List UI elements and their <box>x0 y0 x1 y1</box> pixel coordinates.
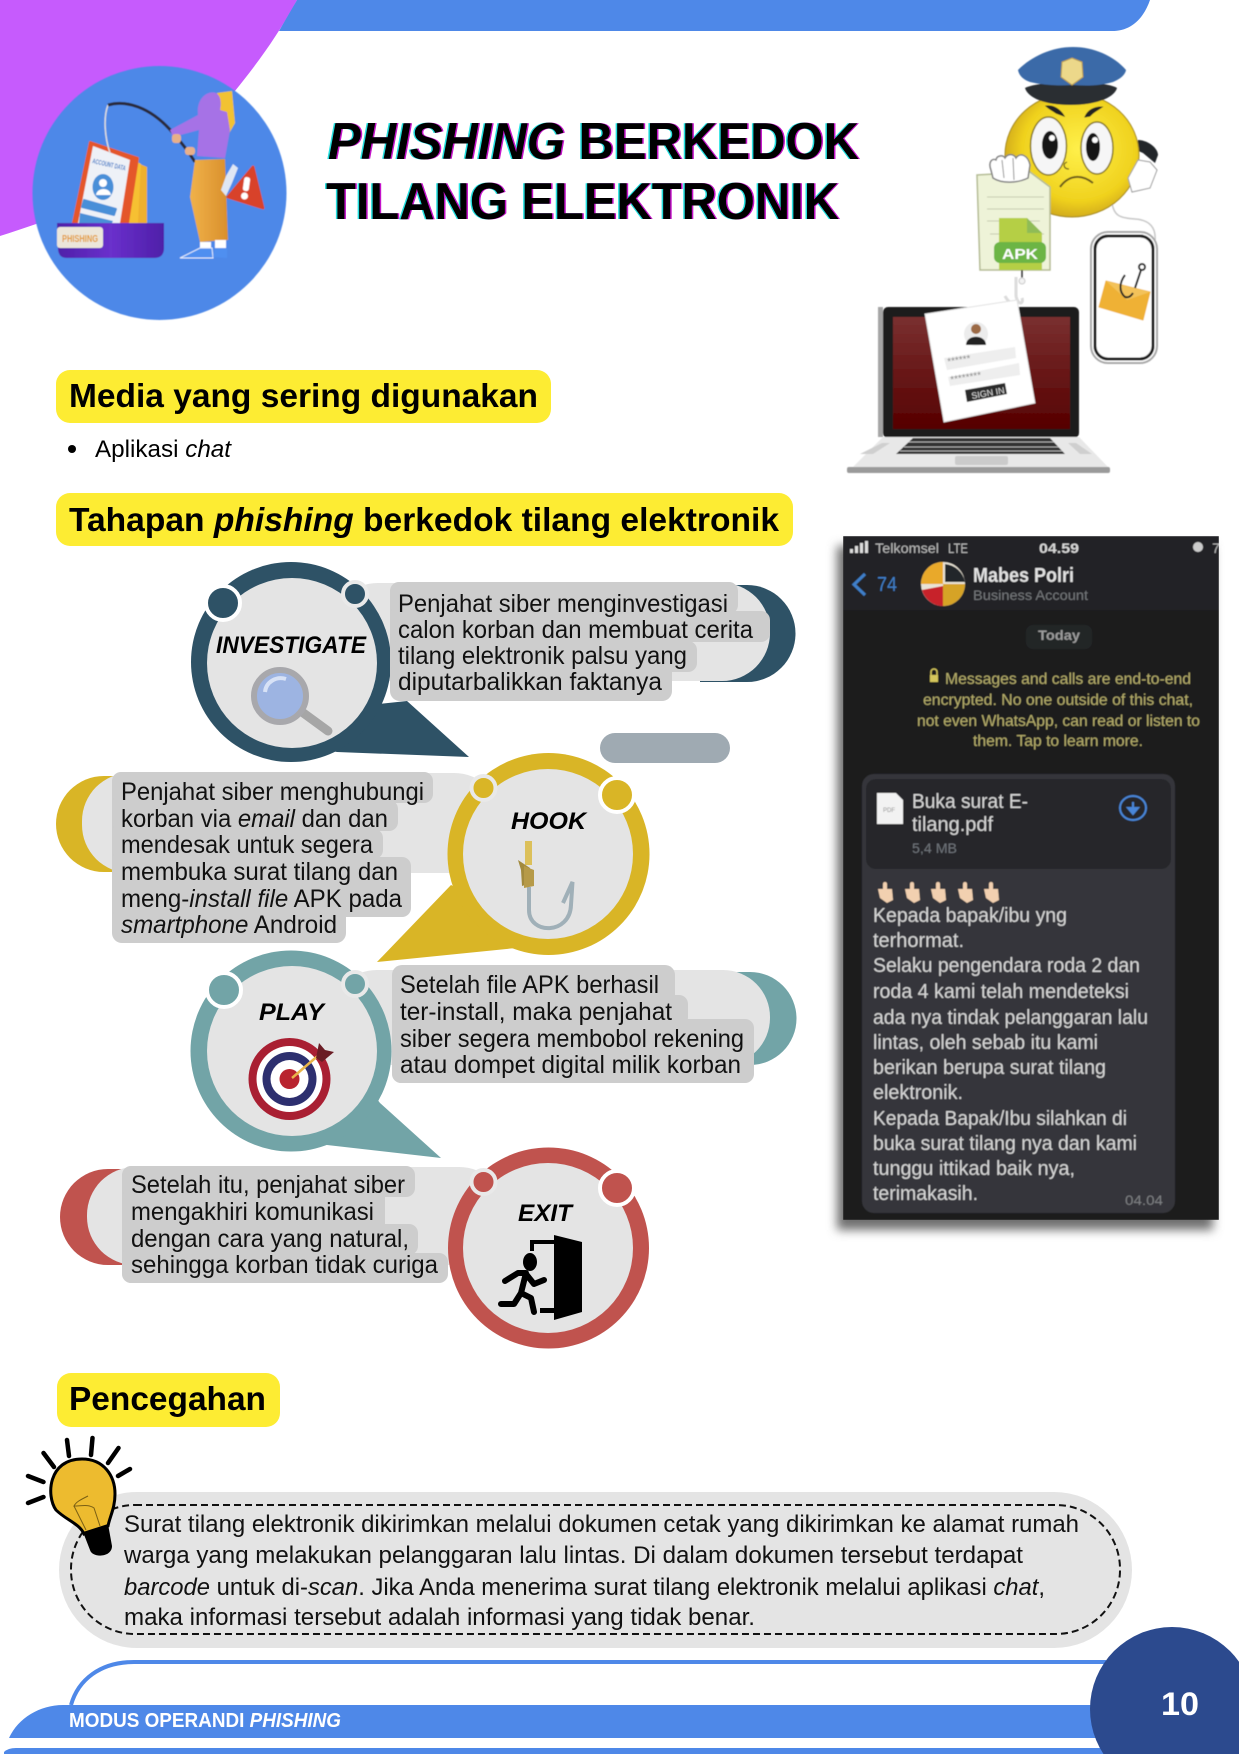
illustration: police emoji, APK document, phone and laptop: ****** <box>947 353 972 368</box>
WhatsApp screenshot: roda 4 kami telah mendeteksi <box>873 981 1129 1003</box>
title: TILANG ELEKTRONIK <box>328 173 841 231</box>
text: play description: atau dompet digital milik korban <box>400 1051 741 1079</box>
text: play description: siber segera membobol rekening <box>400 1025 744 1053</box>
step: investigate: INVESTIGATE <box>216 632 367 659</box>
header illustration: fisherman phishing <box>32 66 286 320</box>
title: PHISHING BERKEDOK <box>326 113 858 171</box>
page number badge <box>1090 1627 1239 1754</box>
WhatsApp screenshot: 04.04 <box>1125 1192 1163 1208</box>
WhatsApp screenshot: tilang.pdf <box>912 814 993 836</box>
purple corner shape <box>0 0 297 236</box>
header illustration: fisherman phishing: ACCOUNT DATA <box>92 158 126 173</box>
WhatsApp screenshot: Kepada Bapak/Ibu silahkan di <box>873 1108 1127 1130</box>
icon: running person and door <box>501 1235 582 1320</box>
prevention callout: barcode untuk di-scan. Jika Anda menerima surat tilang elektronik melalui aplikasi chat, <box>124 1574 1045 1601</box>
WhatsApp screenshot: Kepada bapak/ibu yng <box>873 905 1067 927</box>
icon: light bulb <box>28 1438 130 1556</box>
text: investigate description: calon korban dan membuat cerita <box>398 616 753 644</box>
WhatsApp screenshot: encrypted. No one outside of this chat, <box>923 692 1193 709</box>
footer band: MODUS OPERANDI PHISHING <box>69 1710 341 1732</box>
icon: target with arrow <box>248 1038 334 1120</box>
icon: magnifier <box>254 670 328 731</box>
prevention callout: Surat tilang elektronik dikirimkan melalui dokumen cetak yang dikirimkan ke alamat rumah <box>124 1511 1079 1538</box>
WhatsApp screenshot: Today <box>1038 627 1080 643</box>
title <box>324 113 861 231</box>
text: exit description: mengakhiri komunikasi <box>131 1198 374 1226</box>
WhatsApp screenshot: 04.59 <box>1039 540 1079 556</box>
text: exit description <box>122 1166 448 1283</box>
icon: fish hook <box>518 841 572 928</box>
step: investigate <box>191 562 796 762</box>
step: play <box>190 950 796 1158</box>
WhatsApp screenshot: PDF <box>883 808 895 814</box>
WhatsApp screenshot <box>837 536 1220 1230</box>
text: play description <box>392 965 754 1083</box>
heading: prevention <box>57 1373 280 1427</box>
WhatsApp screenshot: Business Account <box>973 587 1088 603</box>
step: exit <box>60 1148 649 1348</box>
step: hook <box>56 753 650 962</box>
heading: media: Media yang sering digunakan <box>69 377 538 414</box>
text: hook description: smartphone Android <box>121 911 337 939</box>
heading: prevention: Pencegahan <box>69 1380 266 1417</box>
WhatsApp screenshot: 74 <box>877 574 897 596</box>
WhatsApp screenshot: Buka surat E- <box>912 791 1028 813</box>
illustration: police emoji, APK document, phone and laptop: SIGN IN <box>971 385 1005 401</box>
WhatsApp screenshot: buka surat tilang nya dan kami <box>873 1133 1137 1155</box>
text: investigate description <box>390 582 770 701</box>
header illustration: fisherman phishing: PHISHING <box>62 234 98 245</box>
title: TILANG ELEKTRONIK <box>326 173 839 231</box>
step: play: PLAY <box>259 999 326 1026</box>
illustration: police emoji, APK document, phone and laptop: ******** <box>950 370 982 386</box>
heading: media <box>56 370 551 423</box>
text: investigate description: Penjahat siber menginvestigasi <box>398 590 728 618</box>
WhatsApp screenshot: them. Tap to learn more. <box>973 733 1143 750</box>
step: hook: HOOK <box>511 808 588 835</box>
WhatsApp screenshot: not even WhatsApp, can read or listen to <box>917 713 1200 730</box>
title: PHISHING BERKEDOK <box>330 113 861 171</box>
text: exit description: dengan cara yang natural, <box>131 1225 409 1253</box>
WhatsApp screenshot: tunggu ittikad baik nya, <box>873 1158 1075 1180</box>
illustration: police emoji, APK document, phone and laptop: APK <box>1002 246 1038 263</box>
text: investigate description: diputarbalikkan faktanya <box>398 668 662 696</box>
WhatsApp screenshot: Mabes Polri <box>973 565 1074 587</box>
WhatsApp screenshot: terhormat. <box>873 930 964 952</box>
WhatsApp screenshot: Selaku pengendara roda 2 dan <box>873 955 1140 977</box>
text: hook description: mendesak untuk segera <box>121 831 373 859</box>
prevention callout <box>59 1492 1132 1648</box>
text: play description: Setelah file APK berhasil <box>400 971 659 999</box>
text: hook description: membuka surat tilang dan <box>121 858 398 886</box>
heading: stages: Tahapan phishing berkedok tilang elektronik <box>69 501 780 538</box>
WhatsApp screenshot: berikan berupa surat tilang <box>873 1057 1106 1079</box>
prevention callout: warga yang melakukan pelanggaran lalu lintas. Di dalam dokumen tersebut terdapat <box>123 1542 1023 1569</box>
heading: stages <box>56 493 793 546</box>
text: exit description: sehingga korban tidak curiga <box>131 1251 438 1279</box>
text: hook description <box>112 772 433 943</box>
footer band <box>4 1662 1106 1754</box>
title: TILANG ELEKTRONIK <box>324 173 838 231</box>
text: exit description: Setelah itu, penjahat siber <box>131 1171 405 1199</box>
WhatsApp screenshot: LTE <box>948 540 968 556</box>
text: hook description: Penjahat siber menghubungi <box>121 778 424 806</box>
WhatsApp screenshot: lintas, oleh sebab itu kami <box>873 1032 1098 1054</box>
WhatsApp screenshot: Messages and calls are end-to-end <box>945 671 1191 688</box>
grey decorative pill <box>600 733 730 763</box>
text: hook description: korban via email dan dan <box>121 805 388 833</box>
WhatsApp screenshot: 7 <box>1212 540 1220 556</box>
prevention callout: maka informasi tersebut adalah informasi yang tidak benar. <box>124 1604 755 1631</box>
top blue bar <box>279 0 1150 31</box>
WhatsApp screenshot: 5,4 MB <box>912 840 957 856</box>
illustration: police emoji, APK document, phone and laptop <box>847 47 1158 473</box>
WhatsApp screenshot: terimakasih. <box>873 1183 978 1205</box>
WhatsApp screenshot: elektronik. <box>873 1082 963 1104</box>
WhatsApp screenshot: Telkomsel <box>875 540 939 556</box>
text: hook description: meng-install file APK pada <box>121 885 402 913</box>
text: investigate description: tilang elektronik palsu yang <box>398 642 687 670</box>
step: exit: EXIT <box>518 1200 574 1227</box>
text: play description: ter-install, maka penjahat <box>400 998 672 1026</box>
WhatsApp screenshot: ada nya tindak pelanggaran lalu <box>873 1007 1148 1029</box>
title: PHISHING BERKEDOK <box>328 113 859 171</box>
list item: chat application: Aplikasi chat <box>95 436 232 463</box>
page number badge: 10 <box>1161 1686 1199 1722</box>
